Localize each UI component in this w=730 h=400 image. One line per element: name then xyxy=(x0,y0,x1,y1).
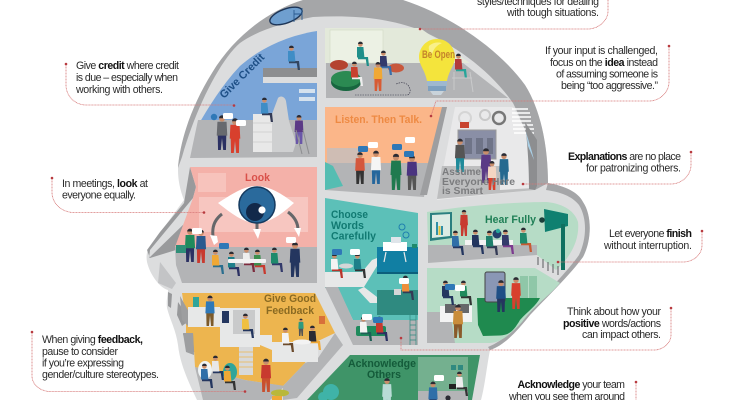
callout: finish: without interruption. xyxy=(603,240,692,252)
callout: give credit: Give credit where credit xyxy=(76,60,179,72)
callout: explanations: Explanations are no place xyxy=(568,151,681,163)
callout: give credit xyxy=(65,60,235,107)
panel: assume everyone here is smart xyxy=(437,107,537,200)
heading: assume everyone here is smart: is Smart xyxy=(442,185,483,197)
panel: be open xyxy=(325,28,508,98)
callout: explanations xyxy=(522,151,692,185)
callout: positive: positive words/actions xyxy=(563,318,661,330)
panel: hear fully xyxy=(427,202,578,275)
callout: feedback: When giving feedback, xyxy=(42,334,143,346)
callout: look: everyone equally. xyxy=(62,190,136,202)
heading: look: Look xyxy=(245,172,271,184)
heading: give good feedback: Feedback xyxy=(266,305,315,317)
callout: feedback xyxy=(31,331,246,393)
panel: look xyxy=(175,167,317,283)
panel: choose words carefully xyxy=(325,198,418,345)
illustration: thumbs-up xyxy=(253,97,296,152)
heading: choose words carefully: Choose xyxy=(331,209,368,221)
heading: assume everyone here is smart: Assume xyxy=(442,166,481,178)
panel: listen then talk xyxy=(325,107,447,197)
head silhouette xyxy=(147,0,590,400)
callout: explanations: for patronizing others. xyxy=(586,162,681,174)
callout: idea: of assuming someone is xyxy=(556,68,658,80)
panel: give good feedback xyxy=(180,293,343,400)
callout: idea xyxy=(430,45,670,117)
callout: positive: Think about how your xyxy=(567,306,661,318)
heading: listen then talk: Listen. Then Talk. xyxy=(335,114,422,126)
panel: acknowledge others xyxy=(307,355,480,400)
callout: idea: being “too aggressive.” xyxy=(561,80,658,92)
callout: finish xyxy=(557,228,703,263)
callout: tough situations: with tough situations. xyxy=(506,7,599,19)
callout: tough situations xyxy=(419,0,608,30)
panel: give credit xyxy=(190,31,317,158)
heading: hear fully: Hear Fully xyxy=(485,214,537,226)
heading: give credit: Give Credit xyxy=(218,51,267,101)
figures in look room xyxy=(176,228,300,277)
icon: light bulb xyxy=(419,39,455,95)
callout: give credit: is due – especially when xyxy=(76,72,178,84)
callout: look: In meetings, look at xyxy=(62,178,148,190)
icon: roof hatch xyxy=(268,4,304,28)
icon: megaphone xyxy=(539,209,568,270)
heading: be open: Be Open xyxy=(422,49,455,61)
callout: give credit: working with others. xyxy=(75,84,163,96)
callout: acknowledge: Acknowledge your team xyxy=(518,379,625,391)
callout: idea: focus on the idea instead xyxy=(550,57,658,69)
heading: give good feedback: Give Good xyxy=(264,293,316,305)
icon: eye xyxy=(210,186,301,245)
figures in give credit room xyxy=(211,46,315,154)
heading: assume everyone here is smart: Everyone Here xyxy=(442,176,515,188)
heading: choose words carefully: Words xyxy=(331,220,364,232)
callout: idea: If your input is challenged, xyxy=(545,45,658,57)
callout: positive: can impact others. xyxy=(582,329,661,341)
heading: acknowledge others: Acknowledge xyxy=(348,358,416,370)
callout: positive xyxy=(400,306,672,350)
panel: positive words and actions xyxy=(427,268,560,343)
callout: feedback: gender/culture stereotypes. xyxy=(42,369,159,381)
callout: acknowledge xyxy=(508,379,637,400)
callout: look xyxy=(51,177,205,214)
callout: feedback: if you’re expressing xyxy=(42,358,124,370)
callout: feedback: pause to consider xyxy=(42,346,118,358)
heading: acknowledge others: Others xyxy=(367,369,401,381)
heading: choose words carefully: Carefully xyxy=(331,230,377,242)
callout: finish: Let everyone finish xyxy=(609,228,692,240)
